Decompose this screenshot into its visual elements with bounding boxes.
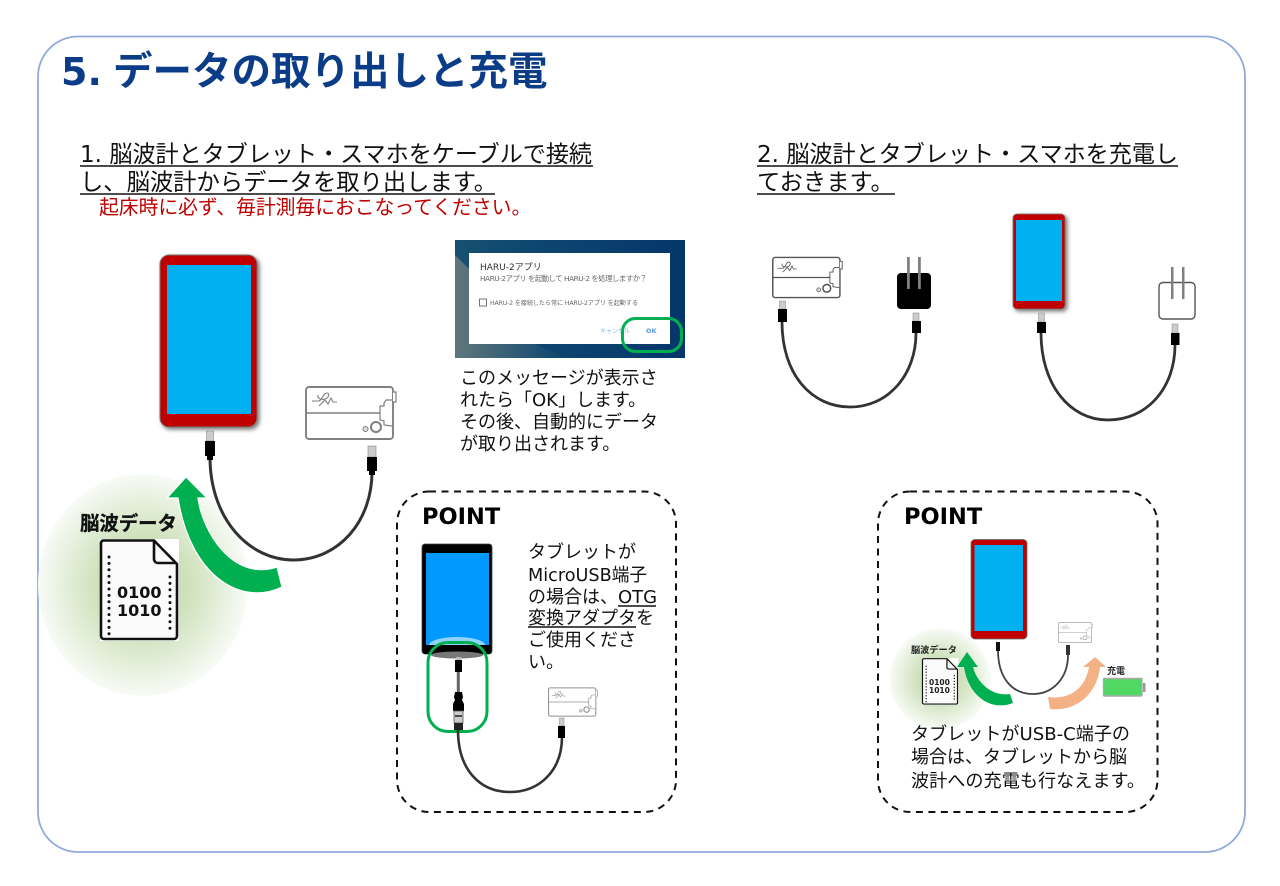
dialog screenshot: HARU-2アプリ — [480, 262, 542, 273]
label: 脳波データ — [911, 644, 957, 656]
point text — [911, 723, 1145, 792]
point text: タブレットがUSB-C端子の — [911, 723, 1130, 745]
point text: 場合は、タブレットから脳 — [911, 746, 1127, 768]
point heading: POINT — [422, 504, 501, 530]
title: データの取り出しと充電 — [113, 49, 548, 95]
icon: data file small — [922, 658, 958, 705]
icon: data file — [100, 539, 179, 641]
phone — [160, 255, 257, 427]
glow — [890, 628, 990, 730]
point text: の場合は、OTG — [528, 587, 657, 608]
cable — [1041, 333, 1175, 420]
point text: 波計への充電も行なえます。 — [911, 771, 1145, 792]
dialog screenshot: キャンセル — [600, 328, 630, 335]
label: charge: 充電 — [1107, 665, 1125, 677]
step 2 heading — [757, 141, 1178, 196]
cable — [998, 650, 1068, 694]
cable — [205, 431, 377, 560]
point box: OTG adapter — [397, 492, 676, 812]
step 1 heading: 1. 脳波計とタブレット・スマホをケーブルで接続 — [80, 141, 592, 168]
cable — [782, 322, 916, 407]
dialog screenshot: OK — [646, 327, 658, 335]
phone connected to device — [160, 255, 396, 560]
dialog screenshot: HARU-2 を接続したら常に HARU-2アプリ を起動する — [490, 299, 638, 307]
point text: MicroUSB端子 — [528, 565, 647, 586]
dialog screenshot — [455, 240, 685, 358]
icon: battery — [1104, 678, 1146, 696]
charging: phone — [1013, 214, 1195, 420]
OTG adapter and cable — [453, 657, 565, 792]
point text: ご使用くださ — [528, 630, 636, 651]
dialog screenshot: HARU-2アプリ を起動して HARU-2 を処理しますか？ — [480, 274, 647, 283]
step 2 heading: 2. 脳波計とタブレット・スマホを充電し — [757, 141, 1178, 168]
label: brain wave data: 脳波データ — [80, 512, 177, 535]
icon: data file small: 1010 — [929, 686, 950, 695]
step 1 heading — [80, 141, 593, 196]
dialog caption: が取り出されます。 — [460, 434, 620, 455]
step 1 heading: し、脳波計からデータを取り出します。 — [80, 169, 497, 196]
dialog caption — [460, 368, 658, 455]
arrow: data out — [167, 477, 282, 593]
point heading: POINT — [904, 504, 983, 530]
glow: brain wave data — [38, 474, 248, 696]
icon: data file: 0100 — [117, 583, 162, 602]
step 2 heading: ておきます。 — [757, 169, 894, 196]
EEG device small — [549, 688, 597, 716]
icon: data file small: 0100 — [929, 678, 950, 687]
white charger — [1159, 267, 1195, 319]
EEG device — [306, 387, 396, 439]
connectors — [996, 642, 1070, 655]
step 1 note in red: 起床時に必ず、毎計測毎におこなってください。 — [99, 196, 531, 219]
charging: device — [773, 257, 931, 407]
arrow: charge — [1048, 657, 1106, 709]
point text: い。 — [528, 652, 564, 673]
highlight: OTG adapter — [428, 642, 487, 732]
icon: data file: 1010 — [117, 601, 162, 620]
dialog caption: れたら「OK」します。 — [460, 390, 646, 411]
point box: USB-C — [878, 492, 1158, 812]
EEG device — [773, 257, 842, 298]
tablet — [422, 544, 492, 658]
point text — [528, 541, 657, 673]
dialog caption: このメッセージが表示さ — [460, 368, 658, 389]
point text: タブレットが — [528, 541, 636, 563]
phone — [1013, 214, 1065, 309]
title: 5. — [61, 50, 102, 94]
point text: 変換アダプタを — [528, 608, 654, 629]
black charger — [897, 257, 931, 309]
arrow: data — [957, 652, 1013, 705]
phone — [971, 540, 1027, 639]
dialog caption: その後、自動的にデータ — [460, 412, 658, 433]
EEG device small — [1058, 623, 1093, 642]
